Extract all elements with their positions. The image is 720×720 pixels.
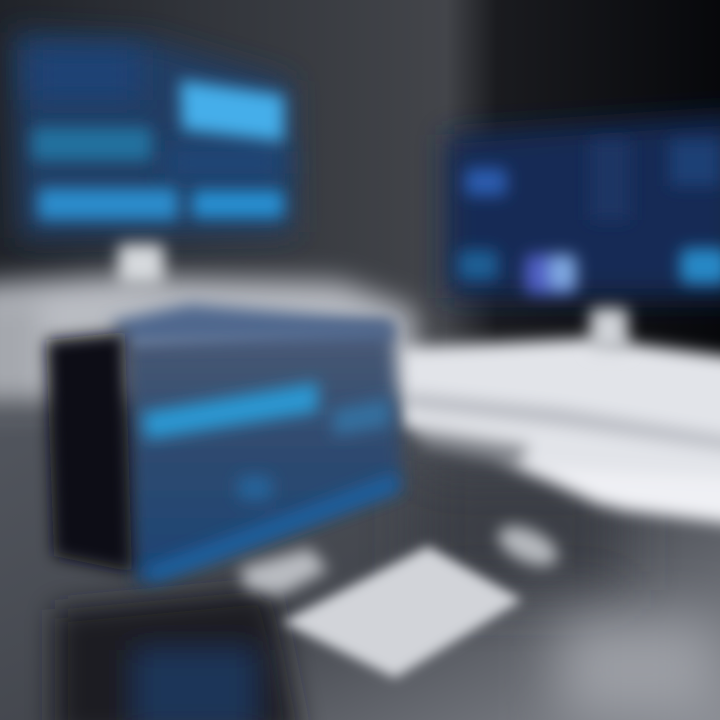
box lower detail — [145, 474, 400, 585]
monitor stand — [590, 308, 628, 352]
left monitor — [12, 32, 294, 284]
keyboard — [282, 546, 522, 678]
box dark side — [46, 332, 132, 572]
screen highlights — [458, 140, 720, 294]
white desk, left section — [0, 275, 415, 405]
monitor stand — [118, 244, 164, 284]
computer tower box — [46, 304, 402, 585]
desk and floor surface — [0, 385, 720, 720]
dark reflection on desk — [55, 590, 300, 720]
monitor screen — [12, 32, 294, 238]
white desk, right section — [400, 338, 720, 525]
screen mottling — [30, 50, 285, 175]
right monitor — [445, 115, 720, 352]
mouse — [492, 518, 564, 574]
screen bars — [32, 127, 284, 220]
glowing band — [142, 382, 390, 440]
box front face — [125, 322, 402, 585]
bright screen panel — [180, 80, 284, 142]
monitor screen — [445, 115, 720, 298]
white block beside box — [240, 548, 328, 596]
box top face — [110, 304, 395, 345]
